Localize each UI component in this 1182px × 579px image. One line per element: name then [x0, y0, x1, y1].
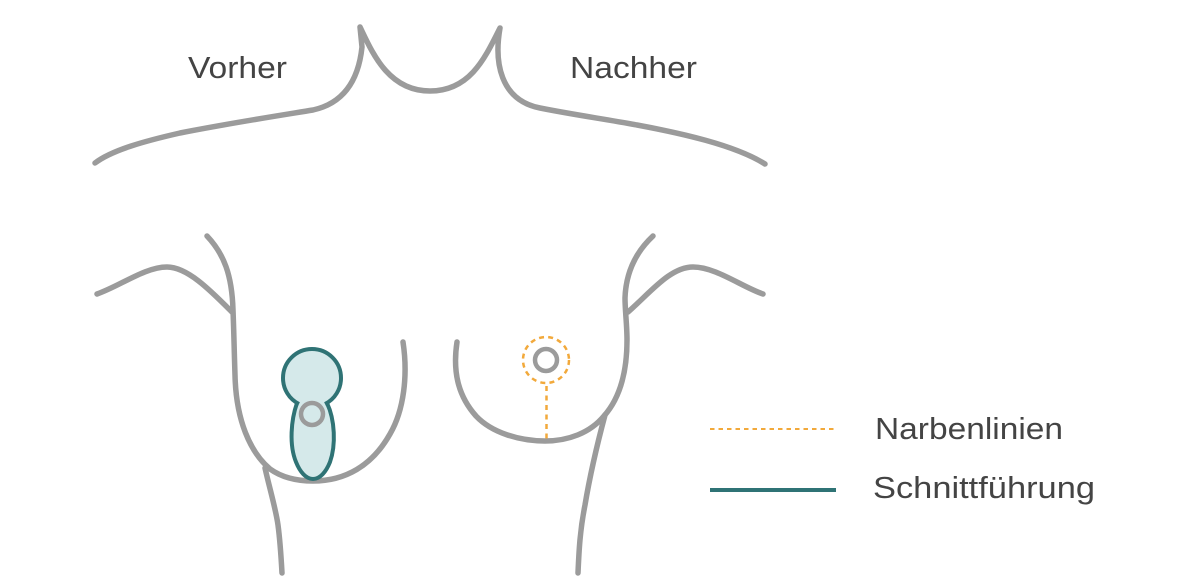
areola after	[535, 349, 557, 371]
before: torso outline	[97, 236, 405, 573]
right breast and body contour	[456, 236, 653, 441]
heading: Nachher: Nachher	[570, 50, 697, 85]
dashed circle scar	[523, 337, 569, 383]
left lower torso line	[265, 468, 282, 573]
legend label: Narbenlinien: Narbenlinien	[875, 411, 1063, 446]
after: torso outline	[456, 236, 763, 573]
left body and breast contour	[207, 236, 405, 481]
legend label: Schnittführung: Schnittführung	[873, 470, 1095, 505]
incision shape upper circle	[283, 349, 341, 414]
areola before	[301, 403, 323, 425]
vertical dashed scar	[545, 386, 548, 439]
right arm line	[628, 267, 763, 312]
legend: scar lines sample	[710, 428, 836, 430]
legend: incision sample	[710, 488, 836, 492]
incision shape lower lobe	[292, 403, 334, 479]
right lower torso line	[578, 415, 605, 573]
legend	[710, 411, 1095, 505]
left arm line	[97, 267, 232, 312]
incision area	[283, 349, 341, 479]
scar lines	[523, 337, 569, 439]
collar and shoulders outline	[95, 27, 765, 164]
heading: Vorher: Vorher	[188, 50, 287, 85]
